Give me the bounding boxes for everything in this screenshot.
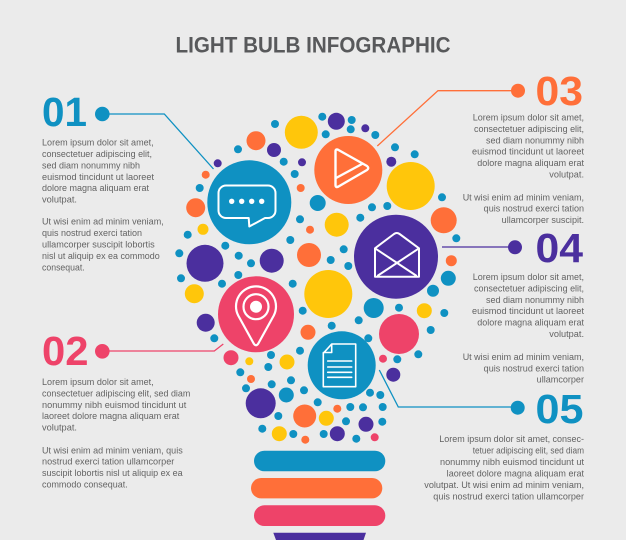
icon: document [308, 331, 376, 399]
connector 05 [379, 370, 525, 415]
text block 04: euismod tincidunt ut laoreet [472, 306, 584, 316]
bulb base bars [251, 451, 385, 540]
text block 04: Lorem ipsum dolor sit amet, [473, 272, 584, 282]
text block 01: Ut wisi enim ad minim veniam, [42, 217, 164, 227]
connector 01 [95, 107, 214, 169]
connector 04 [442, 240, 522, 254]
number 04: 04 [536, 225, 583, 271]
text block 01: volutpat. [42, 195, 77, 205]
number 01: 01 [42, 89, 87, 135]
text block 04: dolore magna aliquam erat [477, 318, 584, 328]
text block 04: consectetuer adipiscing elit, [474, 283, 584, 293]
icon: envelope [354, 215, 438, 299]
number 03: 03 [536, 68, 583, 114]
text block 05: Lorem ipsum dolor sit amet, consec- [439, 434, 584, 444]
text block 05: laoreet dolore magna aliquam erat [447, 468, 584, 478]
text block 01 [42, 138, 164, 272]
light bulb illustration [175, 113, 460, 540]
icon: map pin [218, 276, 294, 352]
text block 04: volutpat. [549, 329, 584, 339]
text block 03: euismod tincidunt ut laoreet [472, 147, 584, 157]
text block 04: Ut wisi enim ad minim veniam, [463, 352, 584, 362]
text block 01: ullamcorper suscipit lobortis [42, 240, 155, 250]
text block 02: laoreet dolore magna aliquam erat [42, 411, 180, 421]
number 02: 02 [42, 328, 88, 374]
text block 01: dolore magna aliquam erat [42, 183, 149, 193]
connector 03 [377, 84, 525, 146]
text block 02: volutpat. [42, 422, 77, 432]
text block 01: nisl ut aliquip ex ea commodo [42, 251, 160, 261]
text block 04 [463, 272, 584, 385]
text block 03: volutpat. [549, 170, 584, 180]
text block 02: nostrud exerci tation ullamcorper [42, 457, 174, 467]
text block 02 [42, 377, 190, 490]
text block 04: ullamcorper [537, 375, 584, 385]
number 05: 05 [536, 386, 584, 432]
title: LIGHT BULB INFOGRAPHIC [176, 32, 451, 58]
text block 03: sed diam nonummy nibh [486, 135, 584, 145]
text block 01: euismod tincidunt ut laoreet [42, 172, 154, 182]
text block 01: consectetuer adipiscing elit, [42, 149, 152, 159]
text block 01: consequat. [42, 262, 85, 272]
text block 05: tetuer adipiscing elit, sed diam [473, 445, 584, 455]
text block 04: quis nostrud exerci tation [484, 363, 584, 373]
text block 03: ullamcorper suscipit. [502, 215, 584, 225]
text block 05: nonummy nibh euismod tincidunt ut [440, 457, 584, 467]
text block 03: Ut wisi enim ad minim veniam, [463, 192, 584, 202]
text block 03: Lorem ipsum dolor sit amet, [473, 112, 584, 122]
text block 01: sed diam nonummy nibh [42, 160, 140, 170]
text block 02: Ut wisi enim ad minim veniam, quis [42, 445, 183, 455]
text block 02: consectetuer adipiscing elit, sed diam [42, 388, 190, 398]
icon: play button [314, 136, 382, 204]
text block 03: consectetuer adipiscing elit, [474, 124, 584, 134]
text block 05: quis nostrud exerci tation ullamcorper [433, 492, 584, 502]
text block 02: Lorem ipsum dolor sit amet, [42, 377, 154, 387]
text block 03: dolore magna aliquam erat [477, 158, 584, 168]
text block 05: volutpat. Ut wisi enim ad minim veniam, [424, 480, 584, 490]
text block 01: quis nostrud exerci tation [42, 228, 142, 238]
connector 02 [95, 344, 223, 359]
bulb dots [175, 113, 460, 444]
text block 03 [463, 112, 584, 225]
text block 02: suscipit lobortis nisl ut aliquip ex ea [42, 468, 183, 478]
text block 03: quis nostrud exerci tation [484, 204, 584, 214]
text block 05 [424, 434, 584, 502]
icon: speech bubble [207, 160, 291, 244]
text block 02: nonummy nibh euismod tincidunt ut [42, 400, 187, 410]
text block 01: Lorem ipsum dolor sit amet, [42, 138, 154, 148]
text block 04: sed diam nonummy nibh [486, 295, 584, 305]
text block 02: commodo consequat. [42, 480, 128, 490]
